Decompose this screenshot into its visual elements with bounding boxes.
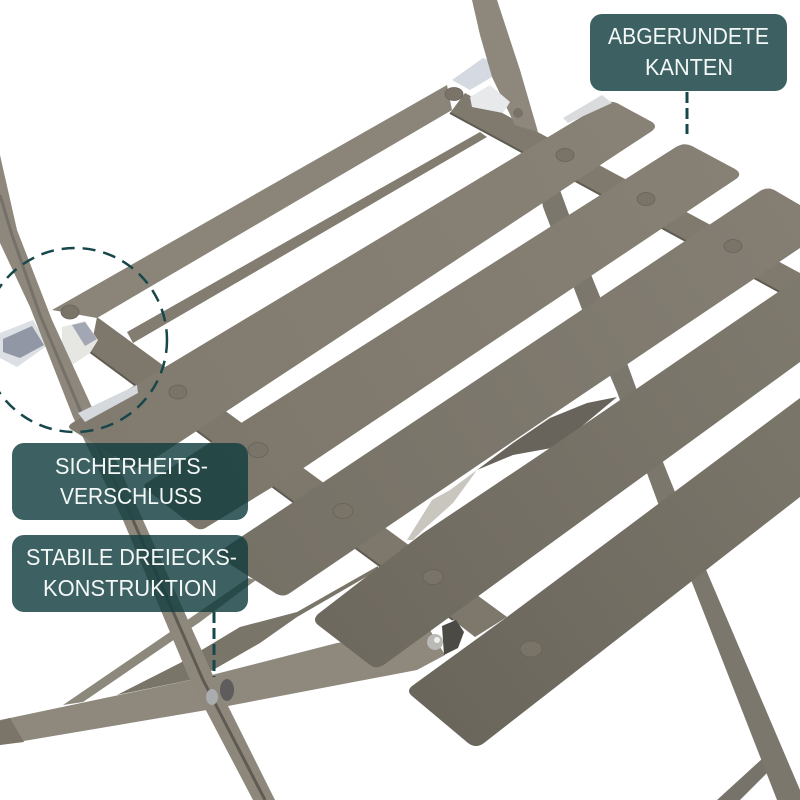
clear clip top right back: [452, 58, 492, 90]
clear clip left: [0, 320, 48, 367]
dashed detail circle: [0, 248, 167, 432]
back cross rail: [52, 85, 452, 318]
lower cross bar: [0, 630, 445, 745]
seat slat 5: [409, 398, 800, 746]
callout: sicherheitsverschluss: SICHERHEITS-: [55, 453, 208, 479]
cross brace lower right: [717, 758, 768, 800]
small rivet back: [513, 108, 523, 118]
clear clip top right front: [470, 85, 510, 113]
seat slat 2: [144, 144, 739, 529]
callout: abgerundete kanten: ABGERUNDETE: [608, 23, 769, 49]
callout: sicherheitsverschluss: VERSCHLUSS: [60, 483, 202, 509]
connector line: triangle construction: [212, 612, 216, 677]
callout: abgerundete kanten: KANTEN: [645, 54, 733, 80]
rivets: [61, 88, 742, 657]
clear edge cap top: [563, 95, 612, 123]
seat slat 1: [69, 102, 655, 468]
clear clip beside leg: [62, 321, 98, 365]
lower thin diagonal strut: [63, 578, 256, 705]
left back leg upper: [0, 155, 275, 800]
callout: stabile dreieckskonstruktion: STABILE DREIECKS-: [26, 544, 237, 570]
right back leg upper: [472, 0, 538, 132]
callout: sicherheitsverschluss: [12, 443, 248, 520]
seat slat 3: [217, 188, 800, 596]
seat slat 4: [315, 277, 800, 667]
middle twisted strut: [477, 397, 617, 470]
pivot bolt: [206, 679, 234, 705]
front right leg: [540, 190, 800, 800]
callout: stabile dreieckskonstruktion: [12, 535, 248, 612]
clear edge cap lower left: [78, 385, 138, 422]
connector line: rounded edges: [686, 92, 688, 134]
left seat rail: [90, 317, 507, 637]
right seat rail: [450, 93, 800, 303]
thin rod: [127, 132, 487, 343]
callout: abgerundete kanten: [590, 14, 787, 91]
lower wide twisted strut: [117, 566, 378, 695]
callout: stabile dreieckskonstruktion: KONSTRUKTION: [43, 575, 217, 601]
light folding strut: [407, 470, 477, 540]
hinge bolt: [427, 620, 474, 655]
left back leg dark stripe: [0, 195, 133, 520]
